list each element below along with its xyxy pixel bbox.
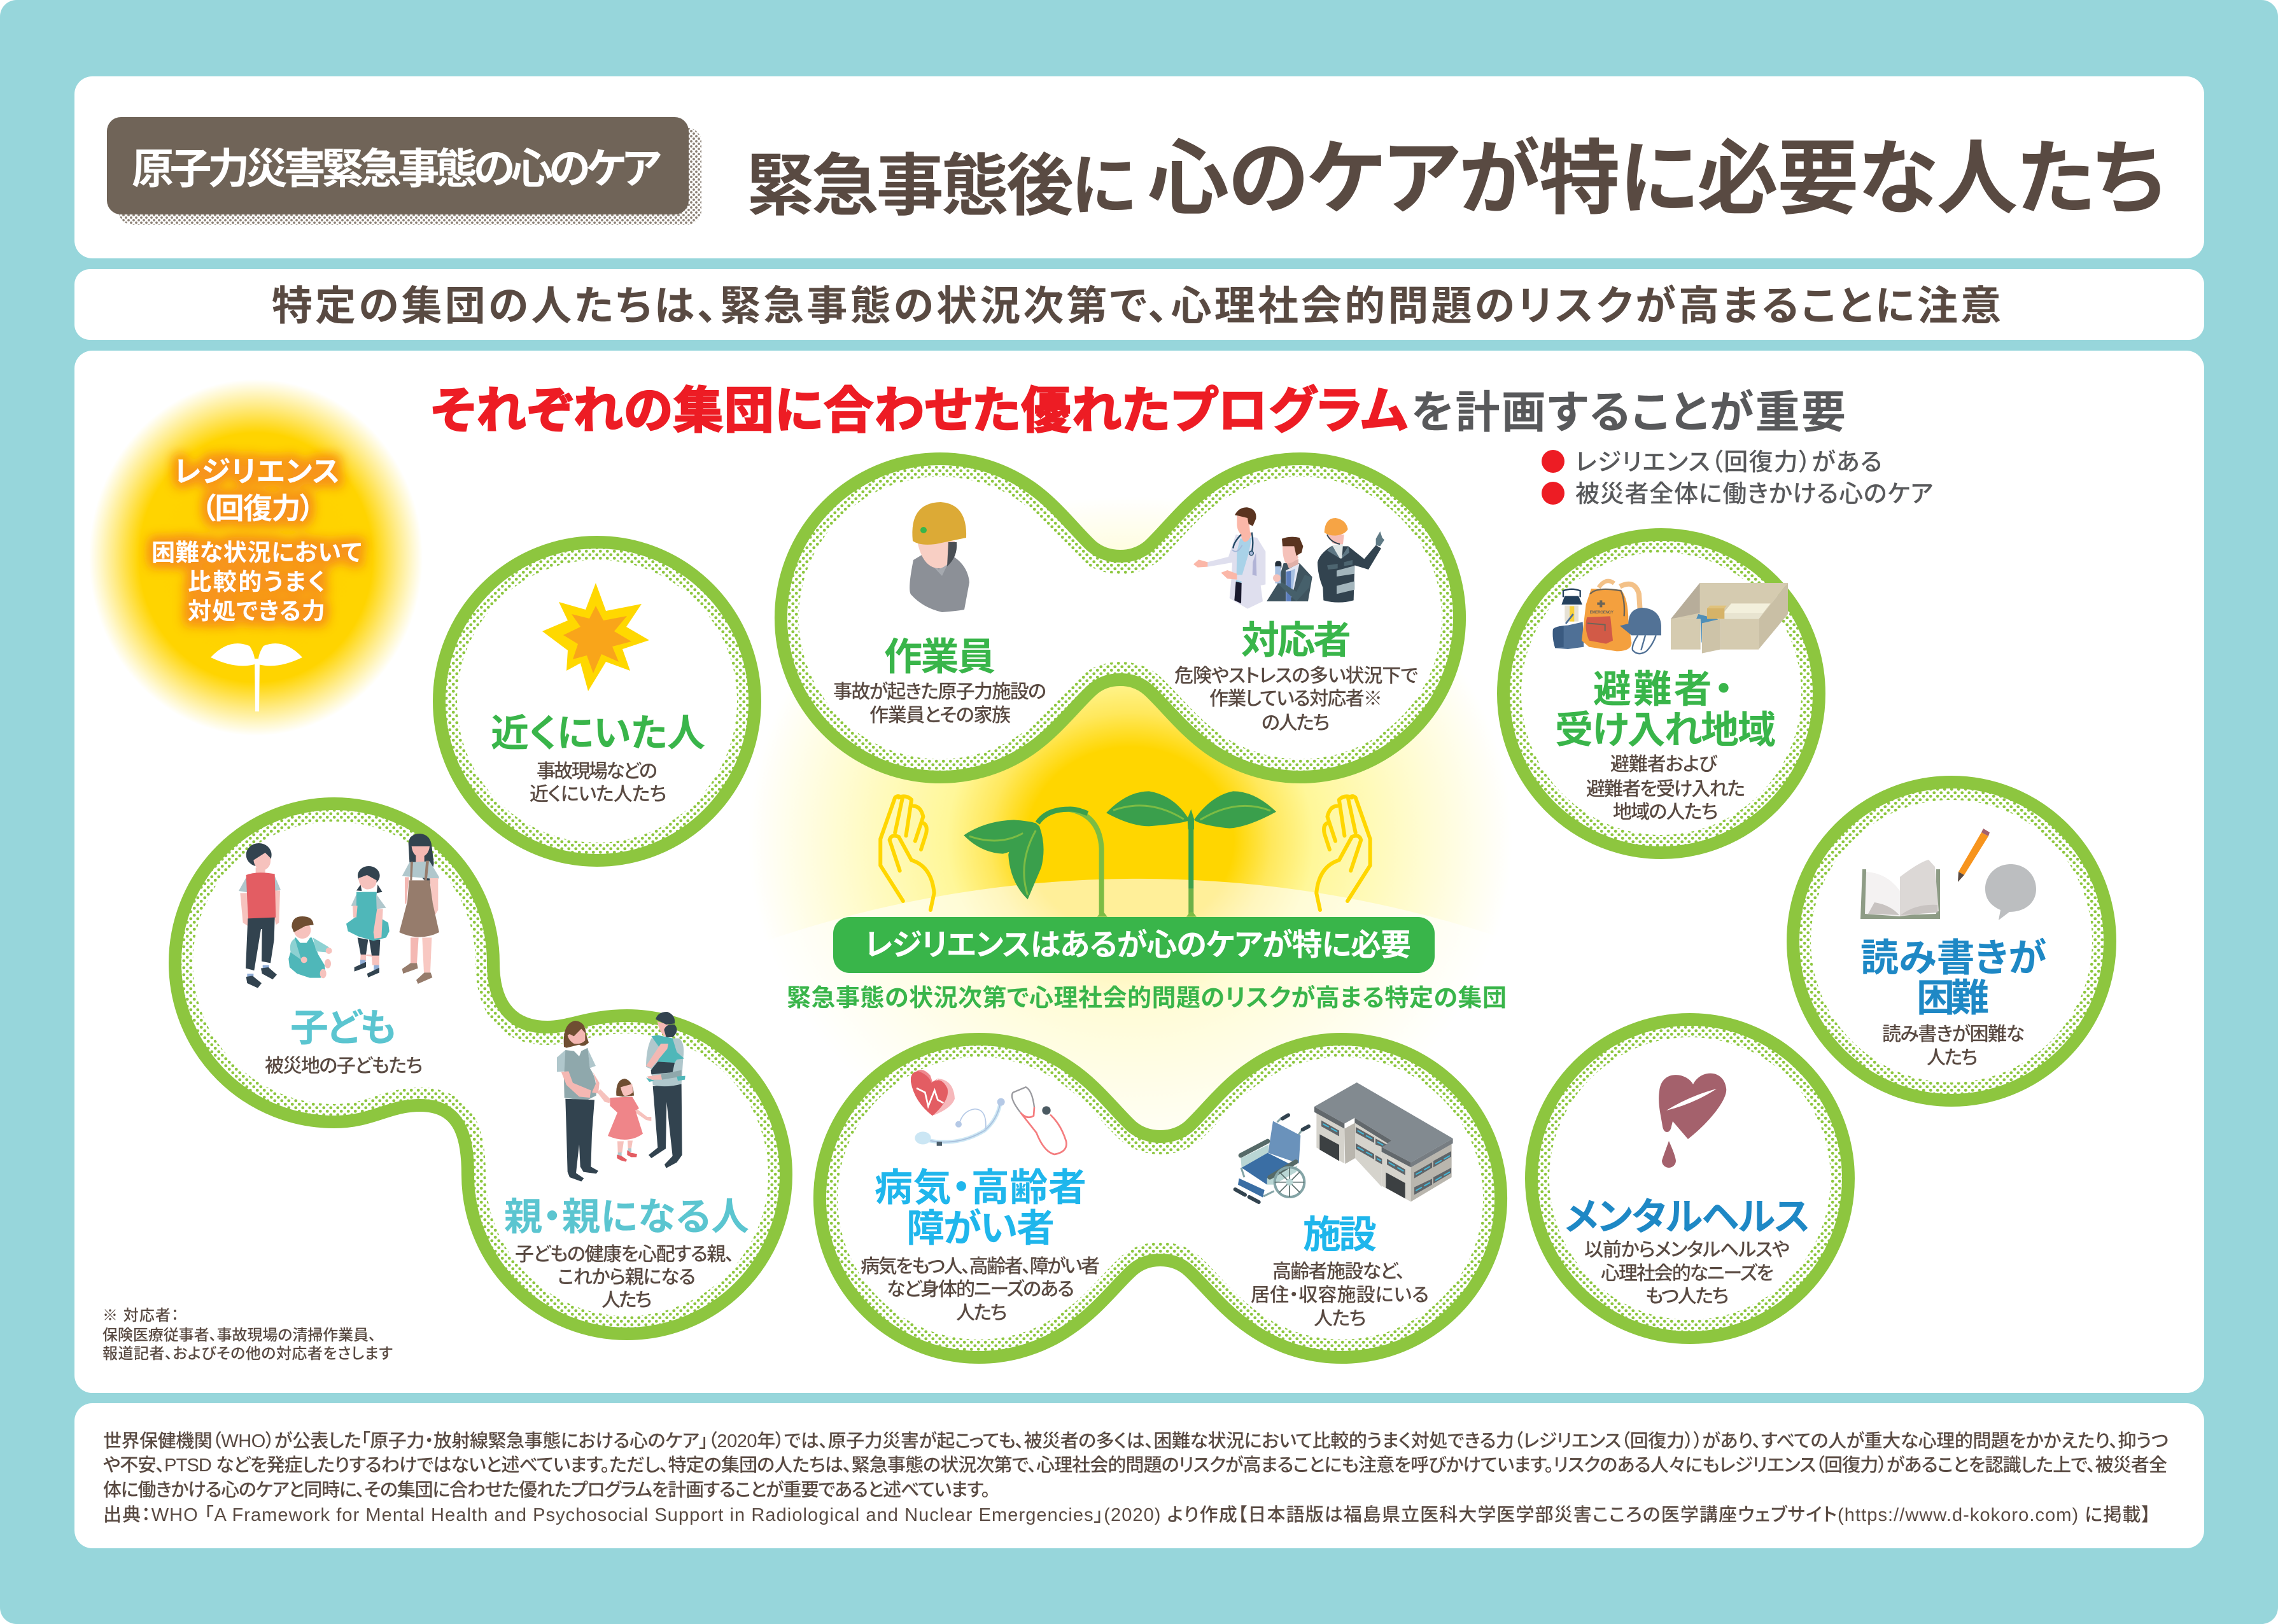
- tag: label: 原子力災害緊急事態の心のケア: [132, 145, 661, 192]
- body text: 体に働きかける心のケアと同時に、その集団に合わせた優れたプログラムを計画することが重要であると述べています。: [103, 1480, 990, 1501]
- bubble: illness, elderly, disability and facilities: [820, 1039, 1501, 1357]
- heading: 親・親になる人: [504, 1196, 749, 1238]
- panel: explanation and source: [74, 1403, 2204, 1548]
- bubble: literacy difficulty: [1793, 782, 2110, 1100]
- description: 高齢者施設など、: [1272, 1261, 1405, 1282]
- description: の人たち: [1262, 713, 1330, 734]
- icon: emergency bag and box: EMERGENCY: [1590, 610, 1614, 615]
- legend: red bullets: 被災者全体に働きかける心のケア: [1575, 481, 1933, 508]
- description: 事故が起きた原子力施設の: [833, 682, 1046, 703]
- resilience sun: 困難な状況において: [151, 540, 362, 566]
- heading: program: それぞれの集団に合わせた優れたプログラム: [431, 382, 1407, 438]
- center caption: 緊急事態の状況次第で心理社会的問題のリスクが高まる特定の集団: [787, 985, 1507, 1012]
- icon: drooping sprout: [964, 809, 1107, 917]
- heading: 近くにいた人: [491, 712, 705, 755]
- heading: 子ども: [290, 1007, 397, 1049]
- description: これから親になる: [558, 1267, 696, 1288]
- heading: program: を計画することが重要: [1411, 388, 1846, 437]
- description: 人たち: [1314, 1308, 1366, 1329]
- description: [1251, 1261, 1429, 1329]
- heading: [1860, 937, 2046, 1019]
- legend: red bullets: レジリエンス（回復力）がある: [1575, 449, 1882, 476]
- description: [1882, 1024, 2025, 1068]
- bubble: children and parents: [175, 804, 786, 1334]
- icon: explosion star: [542, 583, 649, 691]
- description: 読み書きが困難な: [1882, 1024, 2025, 1045]
- description: 作業員とその家族: [869, 705, 1011, 726]
- tag: label: [107, 117, 689, 214]
- panel: main: [74, 351, 2204, 1393]
- icon: worker in helmet: [910, 502, 969, 612]
- heading: 作業員: [884, 636, 995, 678]
- description: 以前からメンタルヘルスや: [1584, 1240, 1790, 1261]
- bubble: nearby people: [439, 542, 755, 860]
- description: 病気をもつ人、高齢者、障がい者: [861, 1256, 1100, 1277]
- icon: four children: [239, 834, 439, 988]
- description: もつ人たち: [1645, 1286, 1729, 1307]
- bubble: mental health: [1531, 1019, 1848, 1338]
- description: [861, 1256, 1100, 1324]
- heading: 病気・高齢者: [875, 1166, 1086, 1209]
- bubble: evacuees and host communities: [1503, 535, 1819, 853]
- description: 避難者および: [1610, 754, 1718, 775]
- heading: 施設: [1303, 1214, 1377, 1256]
- icon: broken heart: [1659, 1074, 1726, 1168]
- description: 避難者を受け入れた: [1586, 779, 1745, 800]
- description: [1174, 666, 1418, 734]
- description: [833, 682, 1046, 726]
- description: 地域の人たち: [1613, 802, 1718, 823]
- icon: white sprout: [211, 643, 302, 711]
- description: [1586, 754, 1745, 823]
- footnote: ※ 対応者：: [102, 1307, 179, 1324]
- description: 被災地の子どもたち: [265, 1056, 423, 1077]
- icon: heart, tube, stethoscope: [911, 1070, 1066, 1154]
- heading: 避難者・: [1593, 668, 1733, 711]
- description: 危険やストレスの多い状況下で: [1174, 666, 1418, 687]
- title heading emphasis: 心のケアが特に必要な人たち: [1148, 134, 2165, 225]
- icon: speech bubble: [1985, 864, 2036, 920]
- resilience sun: [89, 379, 423, 736]
- title heading: 緊急事態後に: [747, 149, 1136, 224]
- heading: program: [431, 382, 1846, 438]
- description: 子どもの健康を心配する親、: [515, 1244, 735, 1265]
- heading: 困難: [1916, 977, 1989, 1019]
- description: 人たち: [1927, 1047, 1978, 1068]
- description: 近くにいた人たち: [530, 784, 666, 805]
- tag: dotted shadow: [118, 128, 701, 225]
- icon: upright sprout: [1106, 791, 1276, 917]
- description: 人たち: [956, 1303, 1007, 1324]
- central yellow glow: [732, 496, 1547, 1184]
- body text: [103, 1431, 2169, 1501]
- description: 事故現場などの: [537, 761, 657, 782]
- bubble: workers and responders: [781, 459, 1459, 777]
- icon: parents with children: [557, 1012, 686, 1182]
- heading: メンタルヘルス: [1564, 1196, 1810, 1238]
- heading: 対応者: [1241, 619, 1351, 662]
- icon: doctor, reporter, worker: [1193, 507, 1384, 609]
- center: hands and sprouts: [880, 791, 1370, 917]
- legend: red bullets: [1542, 449, 1933, 508]
- footnote: [102, 1307, 393, 1362]
- icon: book: [1860, 860, 1940, 919]
- center banner: レジリエンスはあるが心のケアが特に必要: [864, 928, 1411, 962]
- heading: [875, 1166, 1086, 1250]
- heading: 読み書きが: [1860, 937, 2046, 979]
- description: 人たち: [601, 1290, 652, 1311]
- description: [515, 1244, 735, 1311]
- panel: subheading: 特定の集団の人たちは、緊急事態の状況次第で、心理社会的問題のリスクが高まることに注意: [272, 283, 2001, 329]
- description: 作業している対応者※: [1209, 689, 1382, 710]
- icon: left hand: [880, 796, 934, 910]
- icon: pencil: [1958, 829, 1990, 882]
- panel: header: [74, 76, 2204, 258]
- source citation: 出典：WHO 「A Framework for Mental Health and Psychosocial Support in Radiological and Nuclear Emergencies」(2020) より作成【日本語版は福島県立医科大学医学部災害こころの医学講座ウェブサイト(https://www.d-kokoro.com) に掲載】: [103, 1504, 2151, 1525]
- center banner: [833, 917, 1435, 973]
- description: 心理社会的なニーズを: [1601, 1263, 1774, 1284]
- description: 居住・収容施設にいる: [1251, 1285, 1429, 1306]
- heading: 受け入れ地域: [1555, 709, 1776, 752]
- body text: や不安、PTSD などを発症したりするわけではないと述べています。ただし、特定の集団の人たちは、緊急事態の状況次第で、心理社会的問題のリスクが高まることにも注意を呼びかけています。リスクのある人々にもレジリエンス（回復力）があることを認識した上で、被災者全: [103, 1455, 2167, 1476]
- resilience sun: レジリエンス: [174, 455, 340, 488]
- body text: 世界保健機関（WHO）が公表した「原子力・放射線緊急事態における心のケア」（2020年）では、原子力災害が起こっても、被災者の多くは、困難な状況において比較的うまく対処できる力（レジリエンス（回復力））があり、すべての人が重大な心理的問題をかかえたり、抑うつ: [103, 1431, 2169, 1452]
- icon: right hand: [1316, 796, 1370, 910]
- description: など身体的ニーズのある: [887, 1279, 1074, 1300]
- icon: wheelchair and building: [1235, 1082, 1453, 1202]
- panel: subheading: [74, 269, 2204, 340]
- icon: emergency bag and box: [1553, 581, 1788, 654]
- footnote: 保険医療従事者、事故現場の清掃作業員、: [102, 1327, 376, 1344]
- heading: 障がい者: [906, 1207, 1055, 1250]
- description: [1584, 1240, 1790, 1307]
- description: [530, 761, 666, 805]
- footnote: 報道記者、およびその他の対応者をさします: [102, 1345, 393, 1362]
- resilience sun: 比較的うまく: [188, 569, 325, 595]
- resilience sun: （回復力）: [201, 492, 314, 525]
- resilience sun: 対処できる力: [188, 598, 325, 624]
